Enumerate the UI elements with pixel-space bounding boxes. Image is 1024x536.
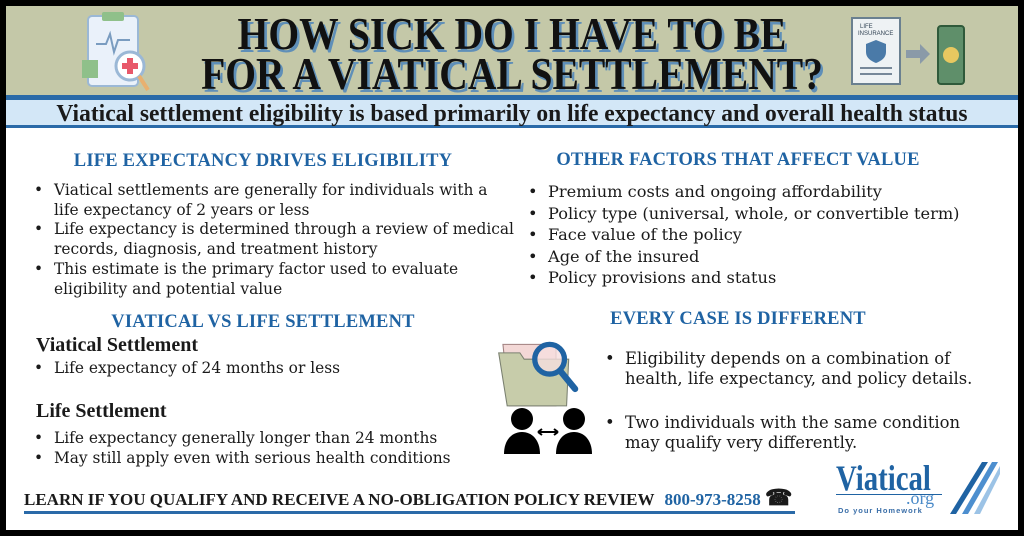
bullets: other factors: Policy type (universal, whole, or convertible term)	[548, 204, 960, 222]
bullets: life settlement: May still apply even with serious health conditions	[54, 449, 451, 467]
logo: viatical.org: Viatical	[836, 458, 931, 498]
icon: life insurance to money: LIFE	[860, 24, 873, 30]
bullets: life settlement: Life expectancy generally longer than 24 months	[54, 429, 437, 447]
icon: life insurance to money: INSURANCE	[858, 31, 893, 37]
subtitle band	[6, 100, 1018, 128]
heading: viatical vs life settlement: VIATICAL VS LIFE SETTLEMENT	[111, 312, 415, 332]
bullets: other factors: Premium costs and ongoing affordability	[548, 182, 882, 201]
icon: life insurance to money	[851, 17, 965, 85]
bullets: every case: may qualify very differently.	[625, 433, 857, 452]
logo: viatical.org: Do your Homework	[838, 506, 923, 515]
bullets: life expectancy: This estimate is the primary factor used to evaluate	[54, 260, 458, 278]
bullets: life expectancy: eligibility and potential value	[54, 280, 282, 298]
blue rule	[6, 95, 1018, 100]
bullets: every case	[608, 349, 972, 452]
title: FOR A VIATICAL SETTLEMENT?	[201, 48, 823, 99]
icon: folder with magnifier	[498, 342, 578, 406]
bullets: life expectancy: life expectancy of 2 years or less	[54, 201, 309, 219]
bullets: other factors: Face value of the policy	[548, 225, 742, 244]
heading: every case is different: EVERY CASE IS DIFFERENT	[610, 309, 866, 329]
heading: other factors: OTHER FACTORS THAT AFFECT VALUE	[556, 150, 920, 170]
bullets: life expectancy: Life expectancy is determined through a review of medical	[54, 220, 514, 238]
subheading: life settlement: Life Settlement	[36, 400, 167, 422]
bullets: life expectancy: Viatical settlements are generally for individuals with a	[54, 181, 488, 199]
logo: viatical.org	[836, 458, 1000, 515]
bullets: every case: Eligibility depends on a combination of	[625, 349, 950, 368]
bullets: every case: Two individuals with the same condition	[625, 413, 960, 432]
title	[201, 8, 823, 99]
footer call to action: LEARN IF YOU QUALIFY AND RECEIVE A NO-OBLIGATION POLICY REVIEW 800-973-8258 ☎	[24, 485, 792, 510]
bullets: other factors	[530, 182, 960, 287]
subtitle: Viatical settlement eligibility is based primarily on life expectancy and overall health status	[56, 100, 968, 127]
subheading: viatical settlement: Viatical Settlement	[36, 334, 198, 356]
bullets: life settlement	[36, 429, 451, 467]
header band	[6, 6, 1018, 96]
bullets: every case: health, life expectancy, and policy details.	[625, 369, 972, 388]
bullets: other factors: Age of the insured	[548, 246, 699, 266]
bullet: viatical: Life expectancy of 24 months or less	[54, 359, 340, 377]
bullets: life expectancy: records, diagnosis, and treatment history	[54, 240, 378, 258]
heading: life expectancy drives eligibility: LIFE EXPECTANCY DRIVES ELIGIBILITY	[74, 151, 452, 171]
icon: two people comparison	[504, 408, 592, 454]
footer underline	[24, 511, 795, 514]
bullets: life expectancy	[36, 181, 514, 298]
icon: medical clipboard	[82, 12, 150, 91]
title: HOW SICK DO I HAVE TO BE	[238, 8, 786, 59]
logo: viatical.org: .org	[906, 488, 934, 508]
bullets: other factors: Policy provisions and status	[548, 268, 776, 287]
